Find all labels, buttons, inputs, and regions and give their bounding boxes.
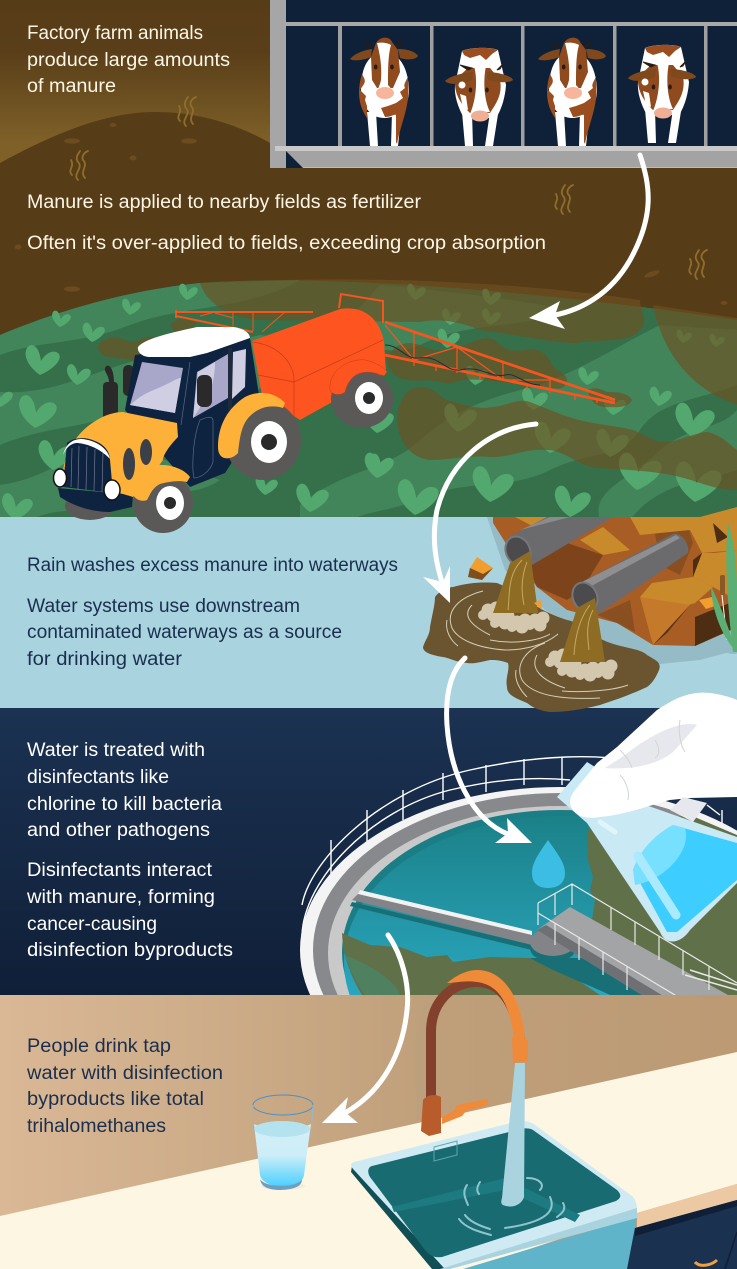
arrow: waterways to treatment — [447, 658, 532, 843]
arrow: treatment to glass — [322, 935, 408, 1123]
faucet — [415, 970, 528, 1136]
rock pile — [487, 507, 737, 665]
background: treatment section — [0, 708, 737, 995]
text: field application — [27, 192, 546, 254]
settling arm — [352, 892, 532, 945]
sink — [351, 1121, 637, 1269]
small rocks — [468, 557, 715, 610]
cab — [125, 338, 259, 487]
headlights — [54, 469, 120, 500]
front fender — [132, 465, 190, 501]
grille — [63, 438, 113, 493]
hood — [63, 412, 178, 497]
cow 2 — [445, 48, 513, 146]
text: manure production: produce large amounts — [27, 50, 230, 71]
text: disinfection: chlorine to kill bacteria — [27, 794, 222, 815]
railing — [302, 757, 722, 935]
text: field application: Often it's over-applied to fields, exceeding crop absorption — [27, 233, 546, 254]
background: soil — [0, 0, 737, 340]
arrow: cows to field — [529, 155, 648, 329]
cow 1 — [350, 38, 418, 146]
pier — [530, 948, 574, 958]
text: disinfection: disinfection byproducts — [27, 940, 233, 961]
green field — [0, 280, 737, 520]
text: disinfection: cancer-causing — [27, 914, 157, 935]
text: tap water: People drink tap — [27, 1036, 171, 1057]
text: manure production: Factory farm animals — [27, 23, 203, 44]
cow 4 — [628, 45, 696, 143]
text: tap water: byproducts like total — [27, 1089, 204, 1110]
text: manure production — [27, 23, 230, 97]
front window — [130, 362, 183, 413]
text: tap water — [26, 1036, 223, 1137]
text: disinfection: Water is treated with — [27, 740, 205, 761]
manure patches on field — [98, 279, 737, 490]
text: runoff: Water systems use downstream — [27, 596, 300, 617]
front wheel — [133, 473, 193, 533]
arrow: field to waterways — [423, 424, 536, 603]
background: rain section — [0, 517, 737, 708]
text: runoff: contaminated waterways as a source — [27, 622, 342, 643]
text: tap water: trihalomethanes — [27, 1116, 166, 1137]
rear wheel — [225, 400, 301, 480]
text: runoff: Rain washes excess manure into waterways — [27, 555, 398, 576]
water drop — [532, 840, 565, 888]
text: runoff — [27, 555, 398, 670]
walkway rails — [537, 883, 737, 995]
land right — [587, 815, 737, 995]
side windows — [193, 354, 228, 418]
exhaust and mirror — [103, 365, 134, 420]
land bottom — [342, 933, 600, 995]
glass of water — [253, 1095, 313, 1190]
cow 3 — [538, 38, 606, 146]
countertop — [0, 1052, 737, 1269]
roof — [138, 327, 250, 357]
text: disinfection: disinfectants like — [27, 767, 169, 788]
boom — [176, 294, 615, 403]
background: kitchen wall — [0, 995, 737, 1269]
text: disinfection: and other pathogens — [27, 820, 210, 841]
beaker — [557, 762, 737, 942]
pipes with manure outflow — [501, 517, 688, 616]
text: manure production: of manure — [27, 76, 116, 97]
text: runoff: for drinking water — [27, 649, 183, 670]
rear right wheel — [331, 370, 393, 428]
treatment tank — [300, 756, 737, 995]
barn stall with rails — [270, 0, 737, 168]
gloved hand — [570, 693, 737, 822]
steam wisps — [70, 97, 707, 279]
feed trough — [275, 146, 737, 168]
front axle wheel — [65, 492, 115, 520]
text: field application: Manure is applied to nearby fields as fertilizer — [27, 192, 422, 213]
walkway — [537, 907, 737, 1000]
text: disinfection — [26, 740, 233, 961]
manure streams and foam — [478, 551, 618, 682]
text: disinfection: with manure, forming — [26, 887, 215, 908]
vents — [123, 448, 135, 480]
reeds — [711, 523, 737, 654]
text: tap water: water with disinfection — [26, 1063, 223, 1084]
fender — [218, 393, 285, 458]
rear fender — [330, 360, 387, 394]
text: disinfection: Disinfectants interact — [27, 860, 213, 881]
water stream and ripples — [459, 1063, 564, 1235]
bumper — [58, 488, 133, 512]
tank — [252, 308, 386, 420]
tractor with manure tank and boom — [54, 294, 615, 533]
manure puddle — [423, 582, 660, 712]
